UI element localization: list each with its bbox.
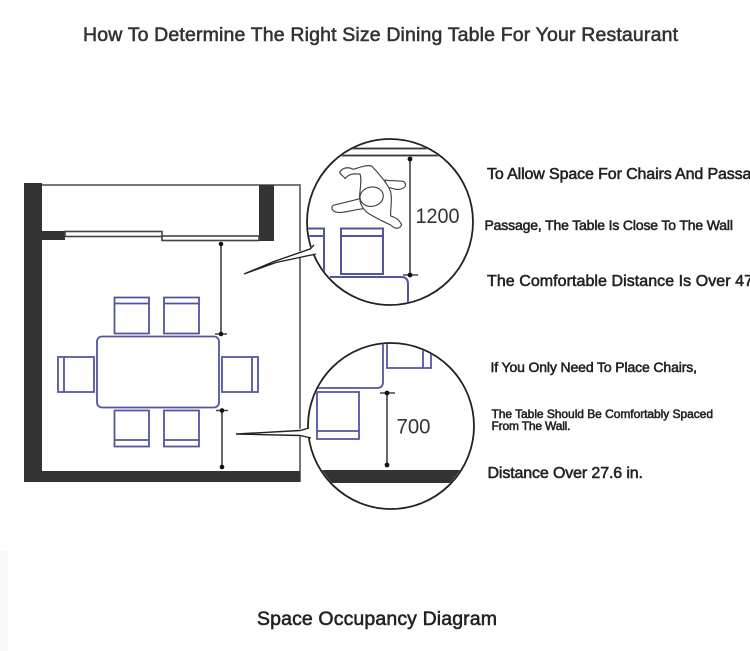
text block: lower notes: If You Only Need To Place Chairs,: [490, 359, 697, 375]
text block: lower notes: Distance Over 27.6 in.: [488, 465, 643, 482]
callout pointer upper: [244, 245, 316, 274]
lower wall band: [322, 470, 460, 483]
sliding door: [65, 232, 259, 240]
chairs and table edge: [308, 228, 409, 302]
lower dimension line: [216, 408, 228, 469]
upper wall lines: [341, 148, 439, 156]
dimension 1200: [403, 157, 418, 277]
upper dimension line: [215, 242, 227, 336]
label 1200: 1200: [416, 205, 460, 228]
chairs and table edge: [316, 344, 432, 440]
callout: 700 detail: [300, 335, 480, 509]
callout: 1200 detail: [300, 139, 480, 310]
label 700: 700: [396, 416, 430, 438]
title: How To Determine The Right Size Dining Table For Your Restaurant: [83, 24, 679, 46]
text block: upper notes: Passage, The Table Is Close To The Wall: [484, 217, 733, 233]
dimension 700: [380, 391, 395, 467]
icon: person walking: [332, 166, 406, 228]
caption: Space Occupancy Diagram: [257, 608, 497, 630]
text block: lower notes: [488, 359, 713, 482]
room walls: [24, 183, 300, 482]
callout pointer lower: [236, 428, 312, 438]
text block: upper notes: [484, 166, 750, 290]
chairs: [58, 298, 258, 446]
text block: lower notes: From The Wall.: [492, 419, 570, 433]
floor plan diagram: [24, 183, 300, 482]
dining table: [97, 336, 219, 408]
text block: lower notes: The Table Should Be Comfortably Spaced: [492, 407, 713, 421]
